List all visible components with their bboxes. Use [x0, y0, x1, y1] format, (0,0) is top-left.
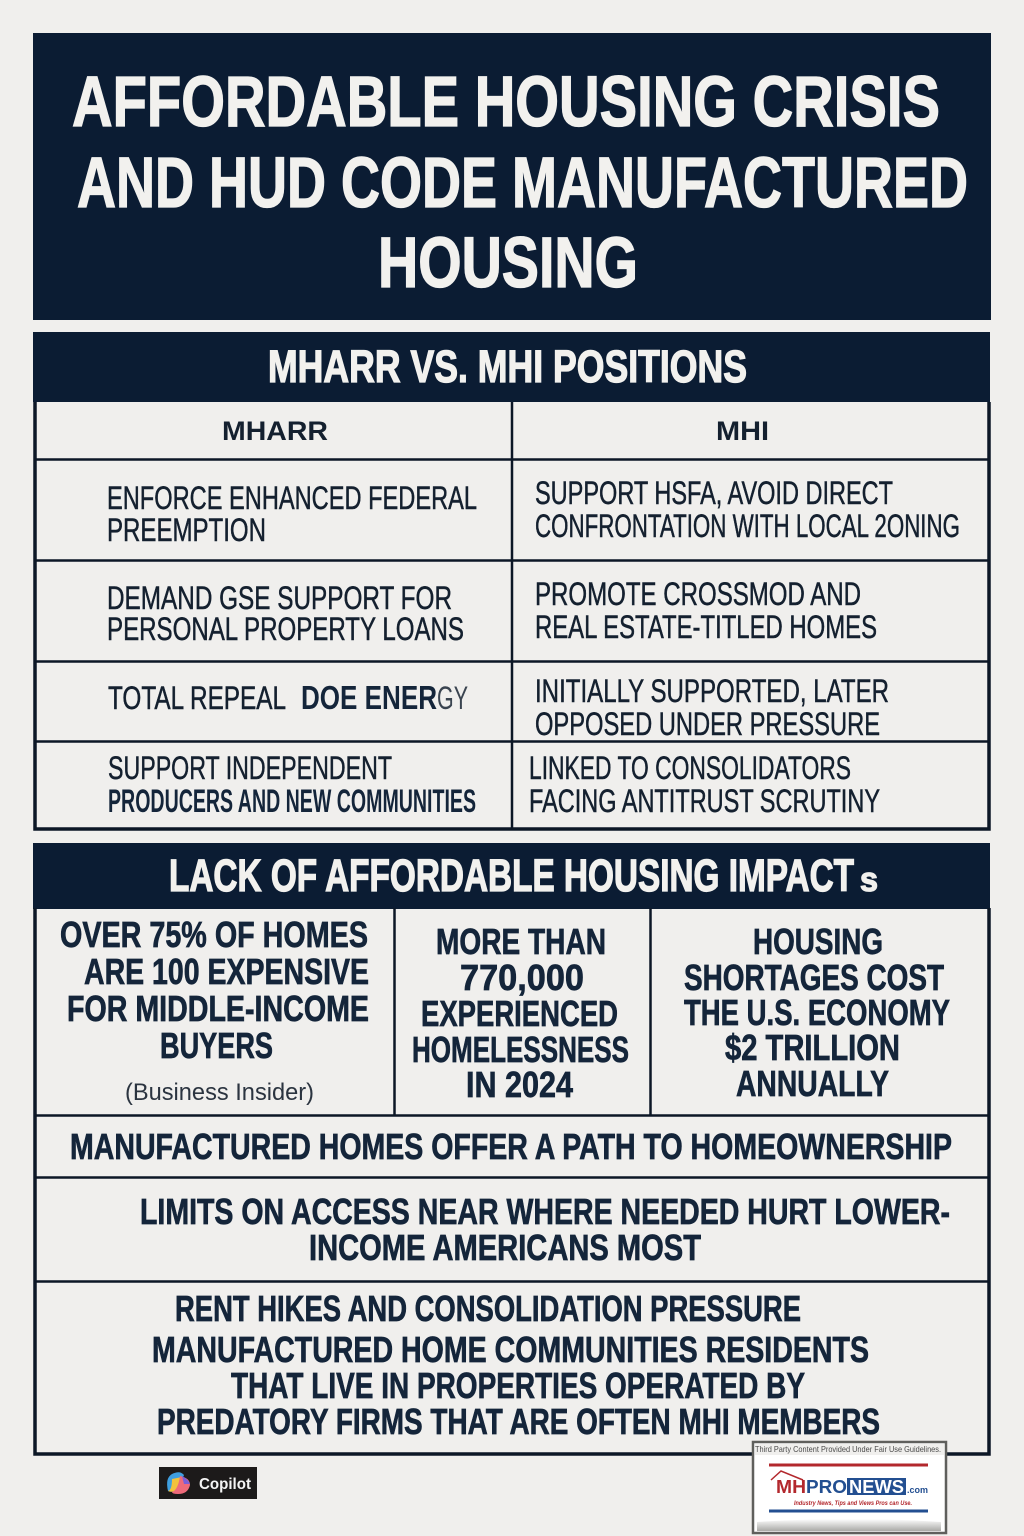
- source note: (Business Insider): [125, 1079, 314, 1106]
- statement: rent hikes and consolidation: [152, 1288, 880, 1442]
- MHProNews logo badge: .com: [907, 1485, 928, 1495]
- statement: rent hikes and consolidation: RENT HIKES AND CONSOLIDATION PRESSURE: [175, 1288, 801, 1329]
- row 1: MHARR: ENFORCE ENHANCED FEDERAL: [107, 480, 477, 516]
- heading: MHARR vs. MHI positions: MHARR VS. MHI POSITIONS: [268, 341, 747, 392]
- row 3: MHARR: TOTAL REPEAL: [108, 680, 286, 716]
- stat: economic cost: THE U.S. ECONOMY: [684, 992, 950, 1033]
- row 4: MHI: LINKED TO CONSOLIDATORS: [529, 750, 851, 786]
- stat: homelessness: [412, 921, 629, 1105]
- row 3: MHI: [535, 673, 889, 742]
- row 2: MHARR: [107, 580, 464, 647]
- heading: MHARR vs. MHI positions: [33, 332, 990, 402]
- row 2: MHI: PROMOTE CROSSMOD AND: [535, 576, 861, 612]
- row 4: MHARR: [108, 750, 476, 819]
- stat: homes too expensive: FOR MIDDLE-INCOME: [67, 988, 369, 1029]
- row 1: MHI: SUPPORT HSFA, AVOID DIRECT: [535, 475, 893, 511]
- row 4: MHI: [529, 750, 880, 819]
- stat: homelessness: EXPERIENCED: [421, 993, 618, 1034]
- title banner: HOUSING: [378, 224, 638, 303]
- column header: MHARR: MHARR: [222, 416, 328, 446]
- MHProNews logo badge: PRO: [806, 1477, 847, 1497]
- stat: economic cost: SHORTAGES COST: [684, 957, 944, 998]
- row 2: MHARR: DEMAND GSE SUPPORT FOR: [107, 580, 452, 616]
- row 2: MHI: [535, 576, 877, 645]
- row 1: MHI: [535, 475, 960, 544]
- stat: economic cost: ANNUALLY: [736, 1063, 889, 1104]
- stat: homes too expensive: BUYERS: [160, 1025, 273, 1066]
- icon: Copilot logo: [167, 1472, 190, 1494]
- Copilot badge: [159, 1467, 257, 1499]
- stat: homes too expensive: [60, 914, 369, 1106]
- row 2: MHI: REAL ESTATE-TITLED HOMES: [535, 609, 877, 645]
- stat: economic cost: HOUSING: [753, 921, 883, 962]
- stat: economic cost: $2 TRILLION: [725, 1027, 900, 1068]
- panel: lack of affordable housing impacts: [33, 843, 990, 1455]
- row 3: MHI: INITIALLY SUPPORTED, LATER: [535, 673, 889, 709]
- row 3: MHARR: DOE ENER: [301, 679, 437, 716]
- statement: limits on access: [140, 1191, 950, 1268]
- row 1: MHARR: PREEMPTION: [107, 512, 266, 548]
- title banner: [33, 33, 991, 320]
- row 3: MHI: OPPOSED UNDER PRESSURE: [535, 706, 880, 742]
- row 1: MHARR: [107, 480, 477, 548]
- MHProNews logo badge: [753, 1442, 946, 1533]
- row 3: MHARR: GY: [437, 680, 468, 716]
- row 3: MHARR: [108, 679, 468, 716]
- stat: homelessness: 770,000: [460, 957, 584, 998]
- stat: homes too expensive: OVER 75% OF HOMES: [60, 914, 368, 955]
- row 4: MHARR: PRODUCERS AND NEW COMMUNITIES: [108, 783, 476, 819]
- heading: lack of affordable housing impacts: s: [860, 861, 878, 899]
- stat: homelessness: IN 2024: [466, 1064, 573, 1105]
- statement: limits on access: INCOME AMERICANS MOST: [309, 1227, 701, 1268]
- stat: homelessness: HOMELESSNESS: [412, 1029, 629, 1070]
- row 4: MHI: FACING ANTITRUST SCRUTINY: [529, 783, 880, 819]
- icon: roof: [771, 1471, 803, 1480]
- column header: MHI: MHI: [716, 416, 769, 446]
- MHProNews logo badge: Industry News, Tips and Views Pros can Use.: [794, 1501, 912, 1507]
- stat: economic cost: [684, 921, 950, 1104]
- Copilot badge: Copilot: [199, 1476, 252, 1493]
- statement: rent hikes and consolidation: THAT LIVE IN PROPERTIES OPERATED BY: [231, 1365, 805, 1406]
- heading: lack of affordable housing impacts: [33, 843, 990, 909]
- row 4: MHARR: SUPPORT INDEPENDENT: [108, 750, 392, 786]
- row 2: MHARR: PERSONAL PROPERTY LOANS: [107, 611, 464, 647]
- MHProNews logo badge: Third Party Content Provided Under Fair Use Guidelines.: [755, 1444, 941, 1454]
- panel: MHARR vs. MHI positions: [33, 332, 990, 830]
- MHProNews logo badge: NEWS: [849, 1477, 904, 1497]
- stat: homelessness: MORE THAN: [436, 921, 606, 962]
- MHProNews logo badge: MH: [776, 1477, 806, 1497]
- stat: homes too expensive: ARE 100 EXPENSIVE: [84, 951, 369, 992]
